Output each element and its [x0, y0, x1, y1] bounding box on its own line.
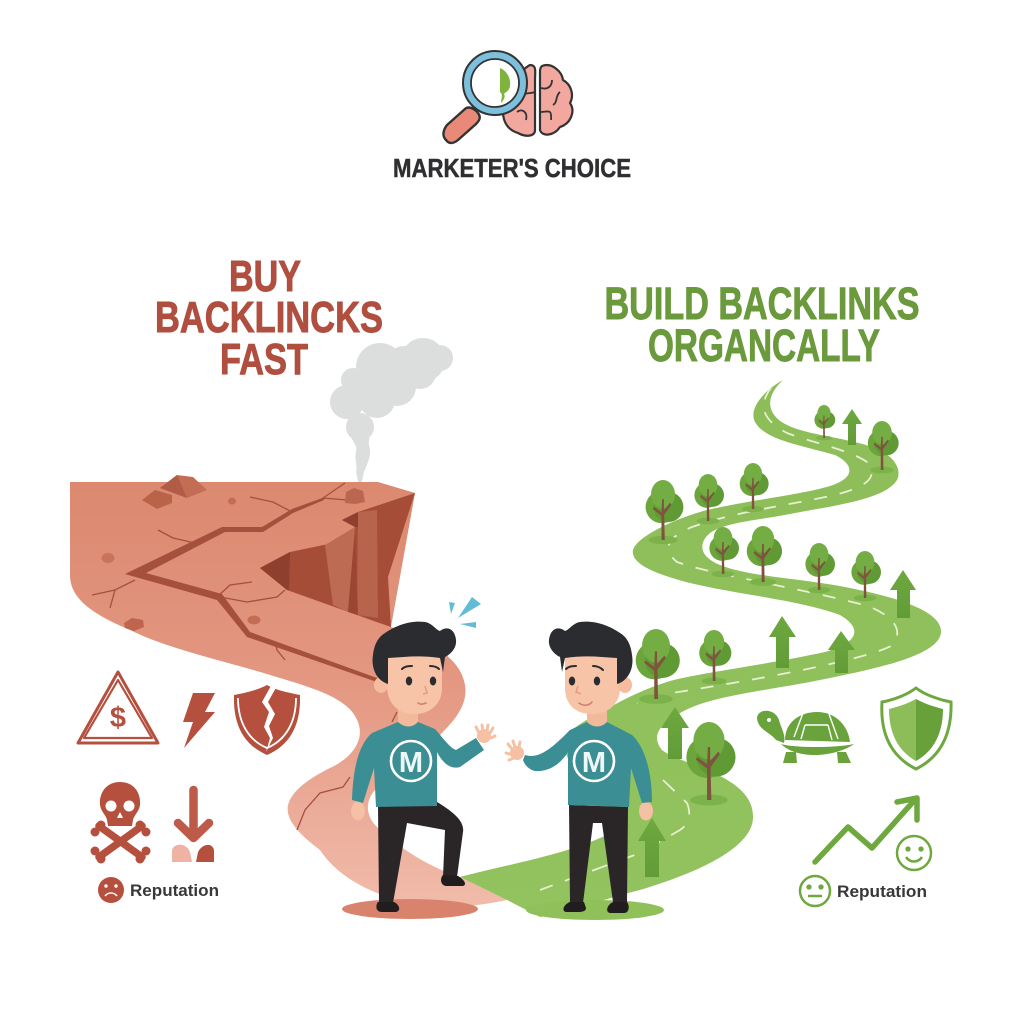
- sweater logo: M: [399, 747, 423, 779]
- icon: cracked shield: [234, 684, 300, 755]
- hair: [373, 622, 456, 684]
- logo: magnifying glass and brain: [443, 51, 572, 143]
- icon: warning triangle with dollar: $: [110, 702, 126, 734]
- icon: green leaf in lens: [500, 68, 510, 103]
- icon: brain: [503, 65, 572, 136]
- shoes: [563, 902, 629, 913]
- sweater: [352, 722, 484, 807]
- title: buy backlincks fast: FAST: [220, 335, 308, 384]
- growth arrows: [638, 409, 916, 877]
- title: buy backlincks fast: BACKLINCKS: [155, 293, 383, 342]
- icon: turtle: [757, 711, 854, 763]
- hands: [506, 741, 653, 820]
- cliff surface and eroding path: [70, 482, 507, 907]
- cracks: [92, 483, 397, 830]
- label: Reputation: [837, 882, 927, 901]
- hair: [549, 622, 632, 684]
- icon: neutral face: [800, 876, 830, 906]
- trousers: [378, 802, 463, 903]
- title: build backlinks organically: [604, 278, 920, 371]
- icon: green shield: [882, 688, 951, 769]
- title: build backlinks organically: BUILD BACKLINKS: [604, 278, 920, 329]
- neck: [398, 708, 418, 730]
- icon: skull and crossbones: [90, 782, 150, 864]
- icon: lightning bolt: [183, 693, 215, 748]
- rocks: [102, 475, 365, 631]
- icon: magnifying glass handle: [443, 108, 480, 143]
- cliff face: [260, 493, 415, 627]
- road surface: [460, 380, 941, 917]
- road centre dashes: [637, 388, 897, 703]
- trees: [636, 405, 899, 805]
- surprise sparks: [449, 597, 481, 628]
- sweater logo: M: [582, 747, 606, 779]
- character: marketer on the green road: [506, 622, 653, 913]
- icon: rising arrow line: [815, 798, 917, 862]
- facial features: [566, 666, 603, 705]
- icon: magnifying glass lens: [467, 55, 523, 111]
- heading: marketer's choice: MARKETER'S CHOICE: [393, 153, 631, 183]
- sweater: [523, 722, 652, 807]
- character: marketer stepping toward the cliff: [351, 622, 495, 912]
- panel: crumbling cliff and path: [70, 475, 507, 907]
- sweater logo: [391, 741, 431, 781]
- shoes: [376, 875, 465, 912]
- icon: sad face: [98, 877, 124, 903]
- panel: winding green road: [460, 380, 941, 917]
- label: Reputation: [130, 881, 219, 900]
- ground shadows under characters: [342, 899, 664, 920]
- smoke cloud: [330, 338, 453, 490]
- title: build backlinks organically: ORGANCALLY: [648, 320, 880, 371]
- reputation growth chart: [800, 798, 931, 906]
- icon: smiling face: [897, 836, 931, 870]
- face: [387, 650, 442, 714]
- hands: [351, 725, 495, 820]
- sweater logo: [574, 741, 614, 781]
- title: buy backlincks fast: [155, 252, 383, 384]
- title: buy backlincks fast: BUY: [229, 252, 301, 301]
- face: [565, 650, 620, 714]
- reputation down label: [98, 877, 219, 903]
- neck: [587, 708, 607, 730]
- facial features: [402, 666, 439, 704]
- trousers: [569, 805, 628, 903]
- icon: falling arrow: [172, 790, 214, 862]
- icon: warning triangle with dollar: [78, 672, 158, 743]
